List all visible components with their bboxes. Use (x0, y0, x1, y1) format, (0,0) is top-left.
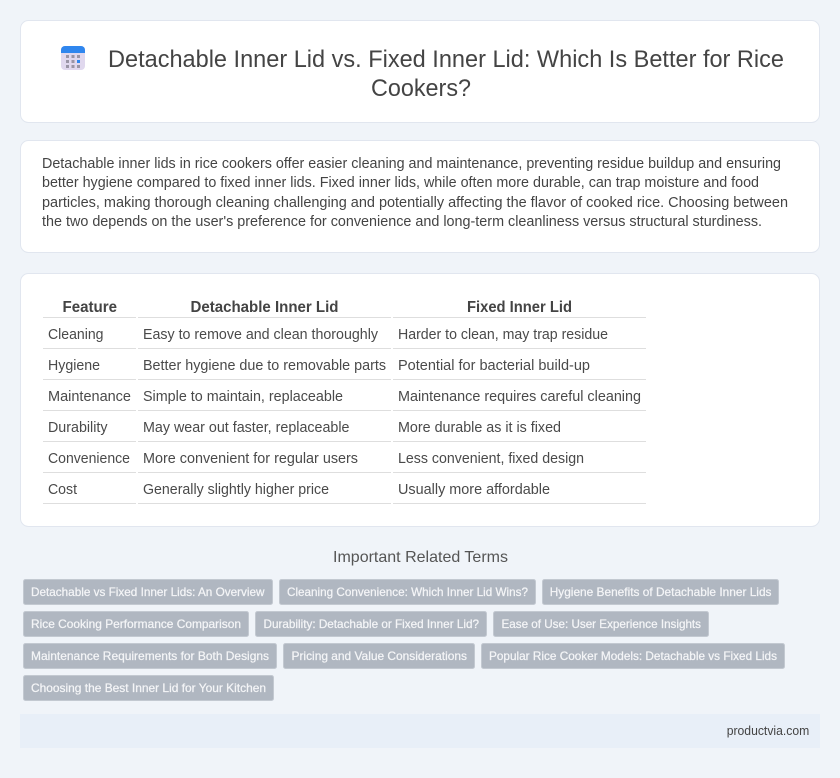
related term tags (24, 580, 784, 700)
title: Cookers? (371, 75, 471, 102)
tag: Detachable vs Fixed Inner Lids: An Overview (31, 585, 265, 599)
tag: Popular Rice Cooker Models: Detachable vs Fixed Lids (489, 649, 777, 663)
tag (482, 644, 784, 668)
summary paragraph: better hygiene compared to fixed inner lids. Fixed inner lids, while often more durable, can trap moisture and food (42, 175, 759, 191)
row: cost (48, 482, 550, 498)
row: convenience: Convenience (48, 451, 130, 467)
row: cost: Usually more affordable (398, 482, 550, 498)
tag (280, 580, 536, 604)
row: durability: More durable as it is fixed (398, 420, 561, 436)
row: maintenance: Simple to maintain, replaceable (143, 389, 343, 405)
row: maintenance: Maintenance requires careful cleaning (398, 389, 641, 405)
summary paragraph: the two depends on the user's preference for convenience and long-term cleanliness versus structural sturdiness. (42, 214, 762, 230)
table header: Feature (62, 299, 117, 316)
row: cleaning: Easy to remove and clean thoroughly (143, 327, 379, 343)
tag: Maintenance Requirements for Both Designs (31, 649, 269, 663)
tag (24, 580, 272, 604)
tag: Rice Cooking Performance Comparison (31, 617, 241, 631)
table header: Detachable Inner Lid (190, 299, 338, 316)
panel: title card (20, 20, 820, 122)
panel: summary text (20, 140, 820, 252)
tag: Pricing and Value Considerations (292, 649, 467, 663)
heading: related terms: Important Related Terms (333, 549, 508, 566)
footer source text: productvia.com (727, 724, 809, 738)
row: cleaning: Cleaning (48, 327, 104, 343)
row: convenience (48, 451, 584, 467)
tag: Cleaning Convenience: Which Inner Lid Wins? (287, 585, 528, 599)
row: durability (48, 420, 561, 436)
footer (20, 714, 820, 748)
row: durability: Durability (48, 420, 108, 436)
tag (542, 580, 778, 604)
row: maintenance (48, 389, 641, 405)
row: hygiene: Hygiene (48, 358, 100, 374)
row: durability: May wear out faster, replaceable (143, 420, 350, 436)
tag (24, 612, 248, 636)
tag (256, 612, 486, 636)
row: cost: Generally slightly higher price (143, 482, 329, 498)
row: maintenance: Maintenance (48, 389, 131, 405)
tag: Choosing the Best Inner Lid for Your Kitchen (31, 681, 266, 695)
summary paragraph: Detachable inner lids in rice cookers offer easier cleaning and maintenance, preventing residue buildup and ensuring (42, 156, 781, 172)
table header (62, 299, 572, 316)
title: Detachable Inner Lid vs. Fixed Inner Lid: Which Is Better for Rice (108, 46, 784, 73)
tag (24, 644, 276, 668)
row: cleaning: Harder to clean, may trap residue (398, 327, 608, 343)
tag (494, 612, 708, 636)
summary paragraph: particles, making thorough cleaning challenging and potentially affecting the flavor of cooked rice. Choosing between (42, 195, 788, 211)
row: cost: Cost (48, 482, 77, 498)
tag: Ease of Use: User Experience Insights (502, 617, 701, 631)
row: convenience: Less convenient, fixed design (398, 451, 584, 467)
row: hygiene: Better hygiene due to removable parts (143, 358, 386, 374)
panel: comparison table (20, 274, 820, 526)
row: cleaning (48, 327, 608, 343)
row: convenience: More convenient for regular users (143, 451, 358, 467)
icon: calendar (61, 46, 85, 70)
tag (24, 676, 274, 700)
tag (284, 644, 474, 668)
table header: Fixed Inner Lid (467, 299, 572, 316)
row: hygiene (48, 358, 590, 374)
tag: Durability: Detachable or Fixed Inner Lid? (264, 617, 479, 631)
row: hygiene: Potential for bacterial build-up (398, 358, 590, 374)
tag: Hygiene Benefits of Detachable Inner Lids (550, 585, 772, 599)
